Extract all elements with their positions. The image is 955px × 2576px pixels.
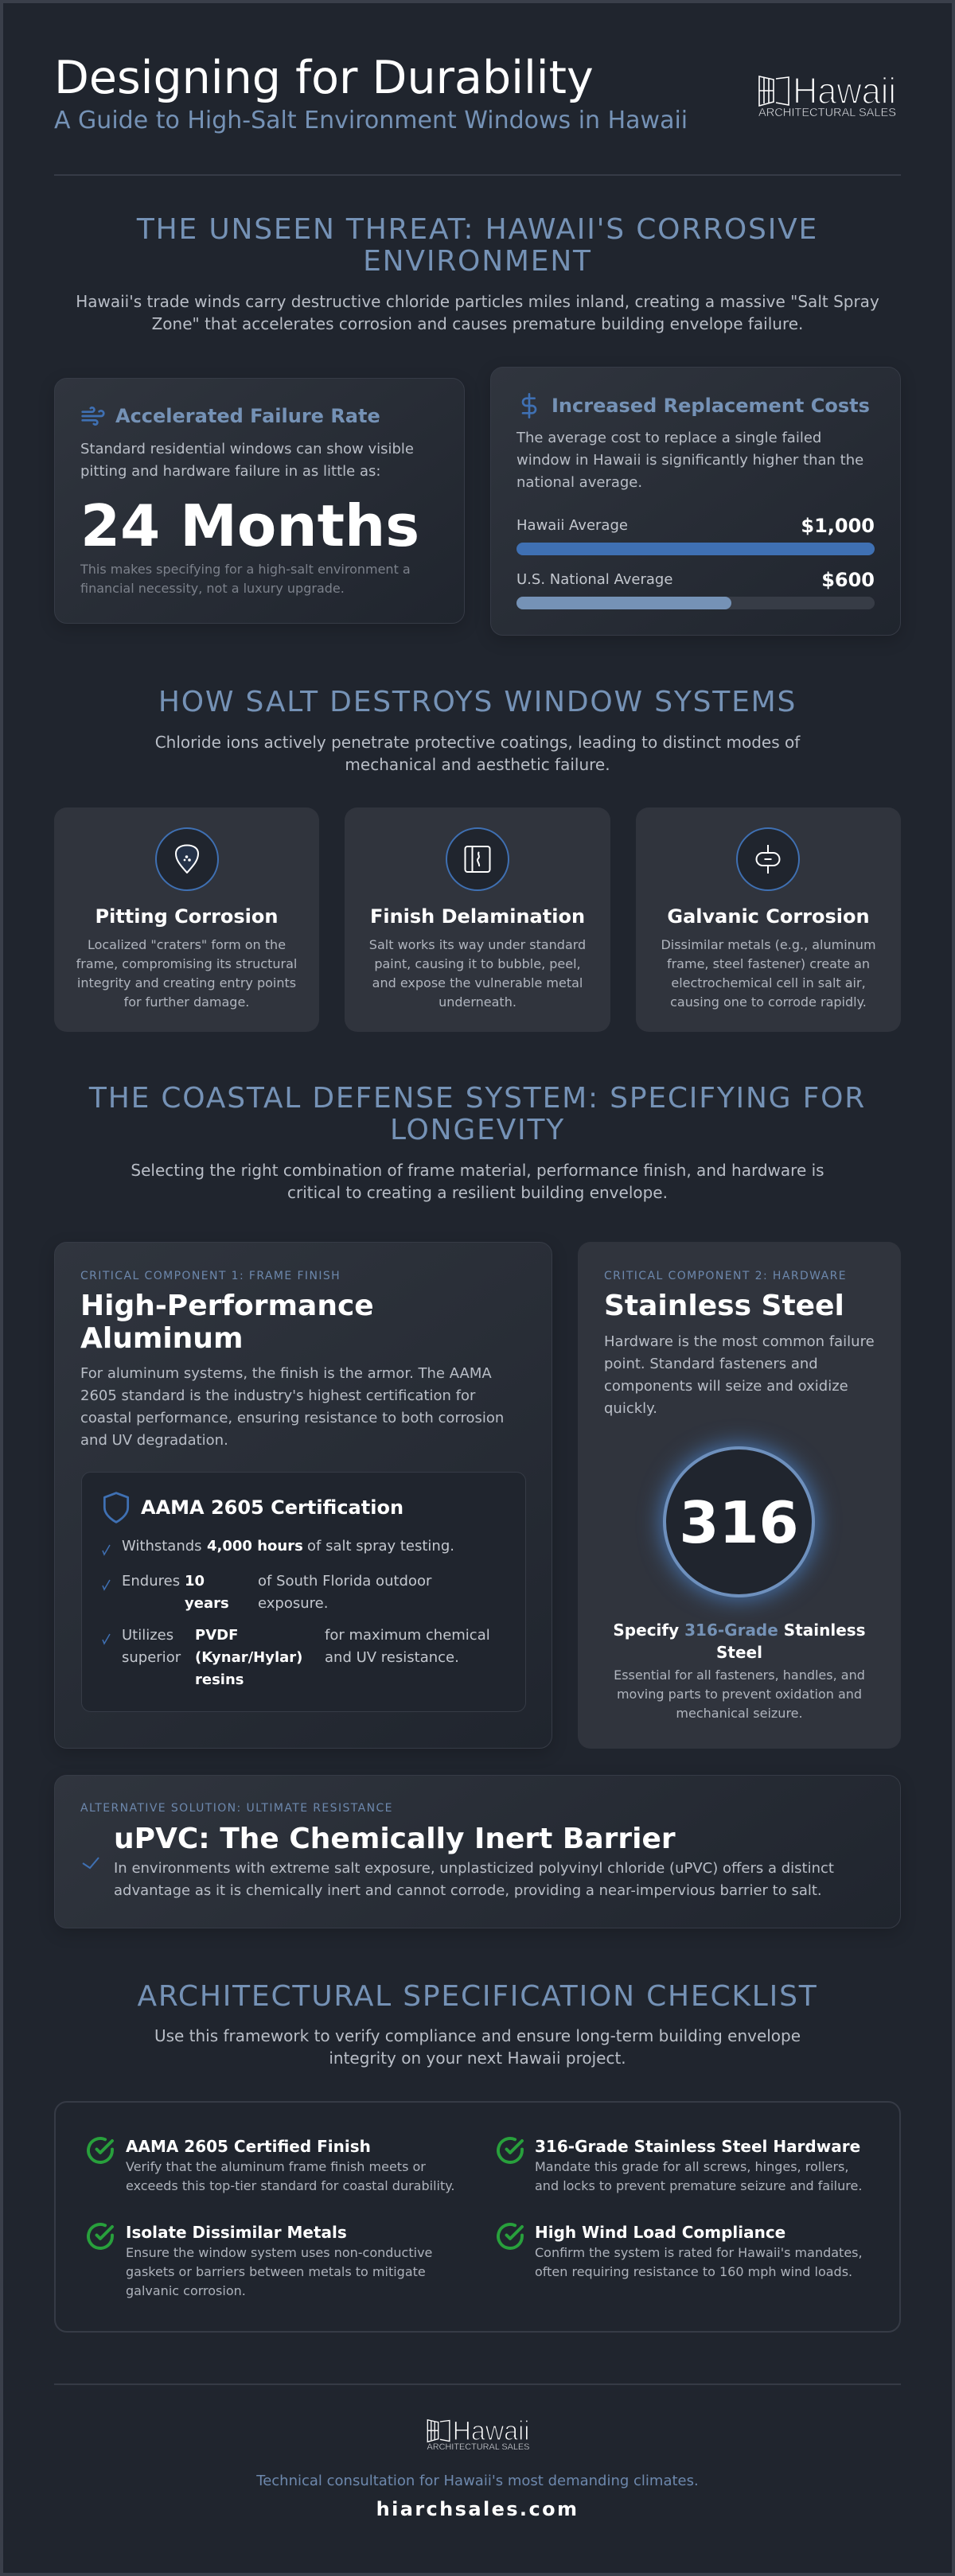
section intro: checklist	[154, 2026, 801, 2068]
text: failure description: pitting and hardware failure in as little as:	[80, 463, 380, 480]
text: pitting corrosion: frame, compromising its structural	[76, 956, 297, 971]
note: financial necessity	[80, 562, 411, 596]
section heading: coastal defense	[89, 1082, 866, 1146]
label: alternative solution: ALTERNATIVE SOLUTION: ULTIMATE RESISTANCE	[80, 1802, 393, 1815]
panel: accelerated failure rate	[54, 378, 465, 624]
section heading: how salt destroys: HOW SALT DESTROYS WINDOW SYSTEMS	[158, 686, 797, 718]
icon: dollar	[522, 393, 536, 418]
text: failure description: Standard residential windows can show visible	[80, 441, 414, 457]
icon: check 2	[102, 1580, 111, 1591]
label: component 1: CRITICAL COMPONENT 1: FRAME FINISH	[80, 1270, 341, 1282]
text: uPVC description: advantage as it is chemically inert and cannot corrode, providing a near-impervious barrier to salt.	[114, 1882, 822, 1899]
list item: outdoor exposure: exposure.	[258, 1595, 328, 1612]
text: hardware description: Hardware is the most common failure	[604, 1333, 875, 1350]
heading: galvanic corrosion: Galvanic Corrosion	[667, 905, 870, 928]
list item: PVDF resins: PVDF	[195, 1627, 238, 1644]
heading: stainless steel: Stainless Steel	[604, 1290, 844, 1322]
icon: check 1	[102, 1545, 111, 1556]
heading: high-performance aluminum: Aluminum	[80, 1322, 243, 1355]
bar value: $1,000: $1,000	[801, 515, 875, 537]
text: cost description	[516, 430, 863, 491]
panel: checklist	[54, 2101, 901, 2333]
list item: outdoor exposure: years	[185, 1595, 229, 1612]
section intro: how salt destroys: Chloride ions actively penetrate protective coatings, leading to distinct modes of	[155, 733, 800, 752]
text: hardware description	[604, 1333, 875, 1417]
text: specify 316-grade: Essential for all fasteners, handles, and	[614, 1667, 865, 1683]
text: aluminum description: coastal performance, ensuring resistance to both corrosion	[80, 1410, 504, 1426]
text: cost description: national average.	[516, 474, 642, 491]
checklist item: dissimilar metals: Ensure the window system uses non-conductive	[126, 2245, 432, 2260]
text: galvanic corrosion: frame, steel fastener) create an	[667, 956, 870, 971]
checklist item: AAMA	[126, 2137, 455, 2193]
list item: PVDF resins: superior	[122, 1649, 181, 1666]
text: uPVC description: In environments with extreme salt exposure, unplasticized polyvinyl chloride (uPVC) offers a distinct	[114, 1860, 834, 1877]
list item: PVDF resins: and UV resistance.	[325, 1649, 459, 1666]
icon: check uPVC	[83, 1857, 99, 1870]
text: pitting corrosion	[76, 937, 297, 1010]
checklist item: wind load: often requiring resistance to 160 mph wind loads.	[535, 2264, 852, 2279]
panel: increased replacement costs	[490, 367, 901, 636]
badge: 316: 316	[679, 1489, 799, 1556]
bar label: Hawaii average: Hawaii Average	[516, 517, 628, 534]
list item: outdoor exposure: 10	[185, 1573, 205, 1590]
text: galvanic corrosion: causing one to corrode rapidly.	[670, 994, 867, 1010]
text: finish delamination: underneath.	[439, 994, 516, 1010]
section heading: unseen threat	[137, 213, 818, 278]
heading: accelerated failure rate: Accelerated Failure Rate	[115, 405, 380, 427]
panel: finish delamination	[345, 807, 610, 1032]
list item: outdoor exposure	[122, 1573, 431, 1612]
list item: outdoor exposure: of South Florida outdoor	[258, 1573, 431, 1590]
footer tagline: Technical consultation for Hawaii's most demanding climates.	[256, 2473, 699, 2489]
icon: check 3	[102, 1634, 111, 1645]
panel: hardware	[578, 1242, 901, 1749]
section heading: coastal defense: THE COASTAL DEFENSE SYSTEM: SPECIFYING FOR	[89, 1082, 866, 1115]
label: component 2: CRITICAL COMPONENT 2: HARDWARE	[604, 1270, 847, 1282]
section intro: how salt destroys: mechanical and aesthetic failure.	[345, 755, 610, 774]
logo: footer: Hawaii	[453, 2416, 529, 2446]
header divider	[54, 174, 901, 176]
text: specify 316-grade	[614, 1667, 865, 1721]
icon: galvanic	[736, 827, 800, 891]
heading: specify 316-grade: Steel	[716, 1643, 762, 1662]
text: specify 316-grade: mechanical seizure.	[676, 1706, 803, 1721]
section intro: unseen threat: Hawaii's trade winds carry destructive chloride particles miles inland, creating a massive "Salt Spray	[76, 292, 879, 311]
panel: pitting corrosion	[54, 807, 319, 1032]
text: galvanic corrosion: Dissimilar metals (e.g., aluminum	[661, 937, 876, 952]
heading: finish delamination: Finish Delamination	[370, 905, 585, 928]
heading: pitting corrosion: Pitting Corrosion	[96, 905, 278, 928]
text: pitting corrosion: Localized "craters" form on the	[88, 937, 286, 952]
section intro: checklist: integrity on your next Hawaii project.	[329, 2049, 626, 2068]
list item: PVDF resins: Utilizes	[122, 1627, 173, 1644]
section intro: coastal defense: Selecting the right combination of frame material, performance finish, and hardware is	[131, 1161, 824, 1180]
list item: salt spray: Withstands	[122, 1538, 202, 1555]
text: finish delamination	[369, 937, 586, 1010]
text: cost description: window in Hawaii is significantly higher than the	[516, 452, 863, 469]
checklist item: dissimilar metals	[126, 2223, 432, 2298]
checklist item: AAMA: exceeds this top-tier standard for coastal durability.	[126, 2178, 455, 2193]
logo: header: ARCHITECTURAL SALES	[758, 106, 896, 119]
text: cost description: The average cost to replace a single failed	[516, 430, 821, 446]
note: financial necessity: This makes specifying for a high-salt environment a	[80, 562, 411, 577]
bar value: $600: $600	[821, 569, 875, 591]
list item: salt spray: of salt spray testing.	[307, 1538, 454, 1555]
panel: frame finish	[54, 1242, 552, 1749]
checklist item: dissimilar metals: gaskets or barriers between metals to mitigate	[126, 2264, 426, 2279]
checklist item: wind load	[535, 2223, 863, 2279]
icon: green check 3	[87, 2223, 114, 2250]
text: finish delamination: Salt works its way under standard	[369, 937, 586, 952]
icon: pitting	[155, 827, 219, 891]
list item: PVDF resins	[122, 1627, 490, 1688]
checklist item: dissimilar metals: Isolate Dissimilar Metals	[126, 2223, 347, 2242]
section heading: checklist: ARCHITECTURAL SPECIFICATION CHECKLIST	[137, 1980, 818, 2013]
icon: green check 4	[497, 2223, 524, 2250]
section intro: coastal defense: critical to creating a resilient building envelope.	[287, 1183, 668, 1202]
checklist item: stainless: Mandate this grade for all screws, hinges, rollers,	[535, 2159, 848, 2174]
heading: uPVC: uPVC: The Chemically Inert Barrier	[114, 1823, 676, 1855]
icon: green check 1	[87, 2137, 114, 2164]
text: hardware description: quickly.	[604, 1400, 657, 1417]
list item: PVDF resins: (Kynar/Hylar)	[195, 1649, 302, 1666]
title: Designing for Durability	[54, 52, 594, 104]
section intro: checklist: Use this framework to verify compliance and ensure long-term building envelope	[154, 2026, 801, 2045]
heading: high-performance aluminum: High-Performance	[80, 1290, 374, 1322]
text: hardware description: components will seize and oxidize	[604, 1378, 848, 1395]
badge: 316	[663, 1446, 815, 1597]
footer website: hiarchsales.com	[376, 2498, 579, 2520]
section heading: unseen threat: THE UNSEEN THREAT: HAWAII'S CORROSIVE	[137, 213, 818, 246]
checklist item: stainless	[535, 2137, 862, 2193]
footer divider	[54, 2383, 901, 2385]
text: pitting corrosion: integrity and creating entry points	[77, 975, 296, 990]
logo: header	[758, 70, 896, 119]
checklist item: stainless: and locks to prevent premature seizure and failure.	[535, 2178, 862, 2193]
checklist item: AAMA: Verify that the aluminum frame finish meets or	[126, 2159, 426, 2174]
checklist item: stainless: 316-Grade Stainless Steel Hardware	[535, 2137, 860, 2156]
text: finish delamination: paint, causing it to bubble, peel,	[374, 956, 581, 971]
list item: salt spray: 4,000 hours	[207, 1538, 303, 1555]
text: galvanic corrosion: electrochemical cell in salt air,	[671, 975, 866, 990]
section heading: coastal defense: LONGEVITY	[390, 1114, 565, 1146]
bar: national	[516, 597, 875, 609]
panel: AAMA certification	[81, 1472, 526, 1712]
bar: Hawaii	[516, 543, 875, 555]
list item: PVDF resins: for maximum chemical	[325, 1627, 490, 1644]
list item: salt spray	[122, 1538, 454, 1555]
heading: high-performance aluminum	[80, 1290, 374, 1355]
list item: outdoor exposure: Endures	[122, 1573, 180, 1590]
icon: wind	[81, 407, 105, 426]
text: hardware description: point. Standard fasteners and	[604, 1356, 818, 1372]
heading: replacement costs: Increased Replacement Costs	[552, 395, 870, 417]
subtitle: A Guide to High-Salt Environment Windows in Hawaii	[54, 107, 688, 134]
section heading: unseen threat: ENVIRONMENT	[363, 245, 592, 278]
list item: PVDF resins: resins	[195, 1671, 244, 1688]
checklist item: wind load: High Wind Load Compliance	[535, 2223, 785, 2242]
icon: shield	[103, 1492, 129, 1523]
heading: specify 316-grade: Specify 316-Grade Stainless	[613, 1621, 866, 1640]
section intro: coastal defense	[131, 1161, 824, 1202]
logo: header: Hawaii	[793, 70, 896, 111]
heading: specify 316-grade	[613, 1621, 866, 1662]
section intro: how salt destroys	[155, 733, 801, 774]
note: financial necessity: financial necessity, not a luxury upgrade.	[80, 581, 345, 596]
icon: delamination	[446, 827, 509, 891]
text: finish delamination: and expose the vulnerable metal	[372, 975, 583, 990]
icon: green check 2	[497, 2137, 524, 2164]
text: failure description	[80, 441, 414, 480]
text: specify 316-grade: moving parts to prevent oxidation and	[617, 1687, 862, 1702]
text: aluminum description: For aluminum systems, the finish is the armor. The AAMA	[80, 1365, 492, 1382]
stat: 24 months: 24 Months	[80, 492, 419, 559]
panel: galvanic corrosion	[636, 807, 901, 1032]
heading: AAMA certification: AAMA 2605 Certification	[141, 1496, 403, 1519]
checklist item: wind load: Confirm the system is rated for Hawaii's mandates,	[535, 2245, 863, 2260]
text: aluminum description: and UV degradation.	[80, 1432, 228, 1449]
section intro: unseen threat: Zone" that accelerates corrosion and causes premature building envelope failure.	[152, 314, 803, 333]
text: aluminum description: 2605 standard is the industry's highest certification for	[80, 1387, 475, 1404]
bar label: national average: U.S. National Average	[516, 571, 672, 588]
checklist item: AAMA: AAMA 2605 Certified Finish	[126, 2137, 371, 2156]
text: aluminum description	[80, 1365, 504, 1449]
checklist item: dissimilar metals: galvanic corrosion.	[126, 2283, 246, 2298]
logo: footer	[427, 2419, 530, 2450]
section intro: unseen threat	[76, 292, 879, 333]
text: pitting corrosion: for further damage.	[124, 994, 249, 1010]
text: galvanic corrosion	[661, 937, 876, 1010]
panel: uPVC alternative	[54, 1775, 901, 1928]
text: uPVC description	[114, 1860, 834, 1899]
logo: footer: ARCHITECTURAL SALES	[427, 2442, 529, 2452]
